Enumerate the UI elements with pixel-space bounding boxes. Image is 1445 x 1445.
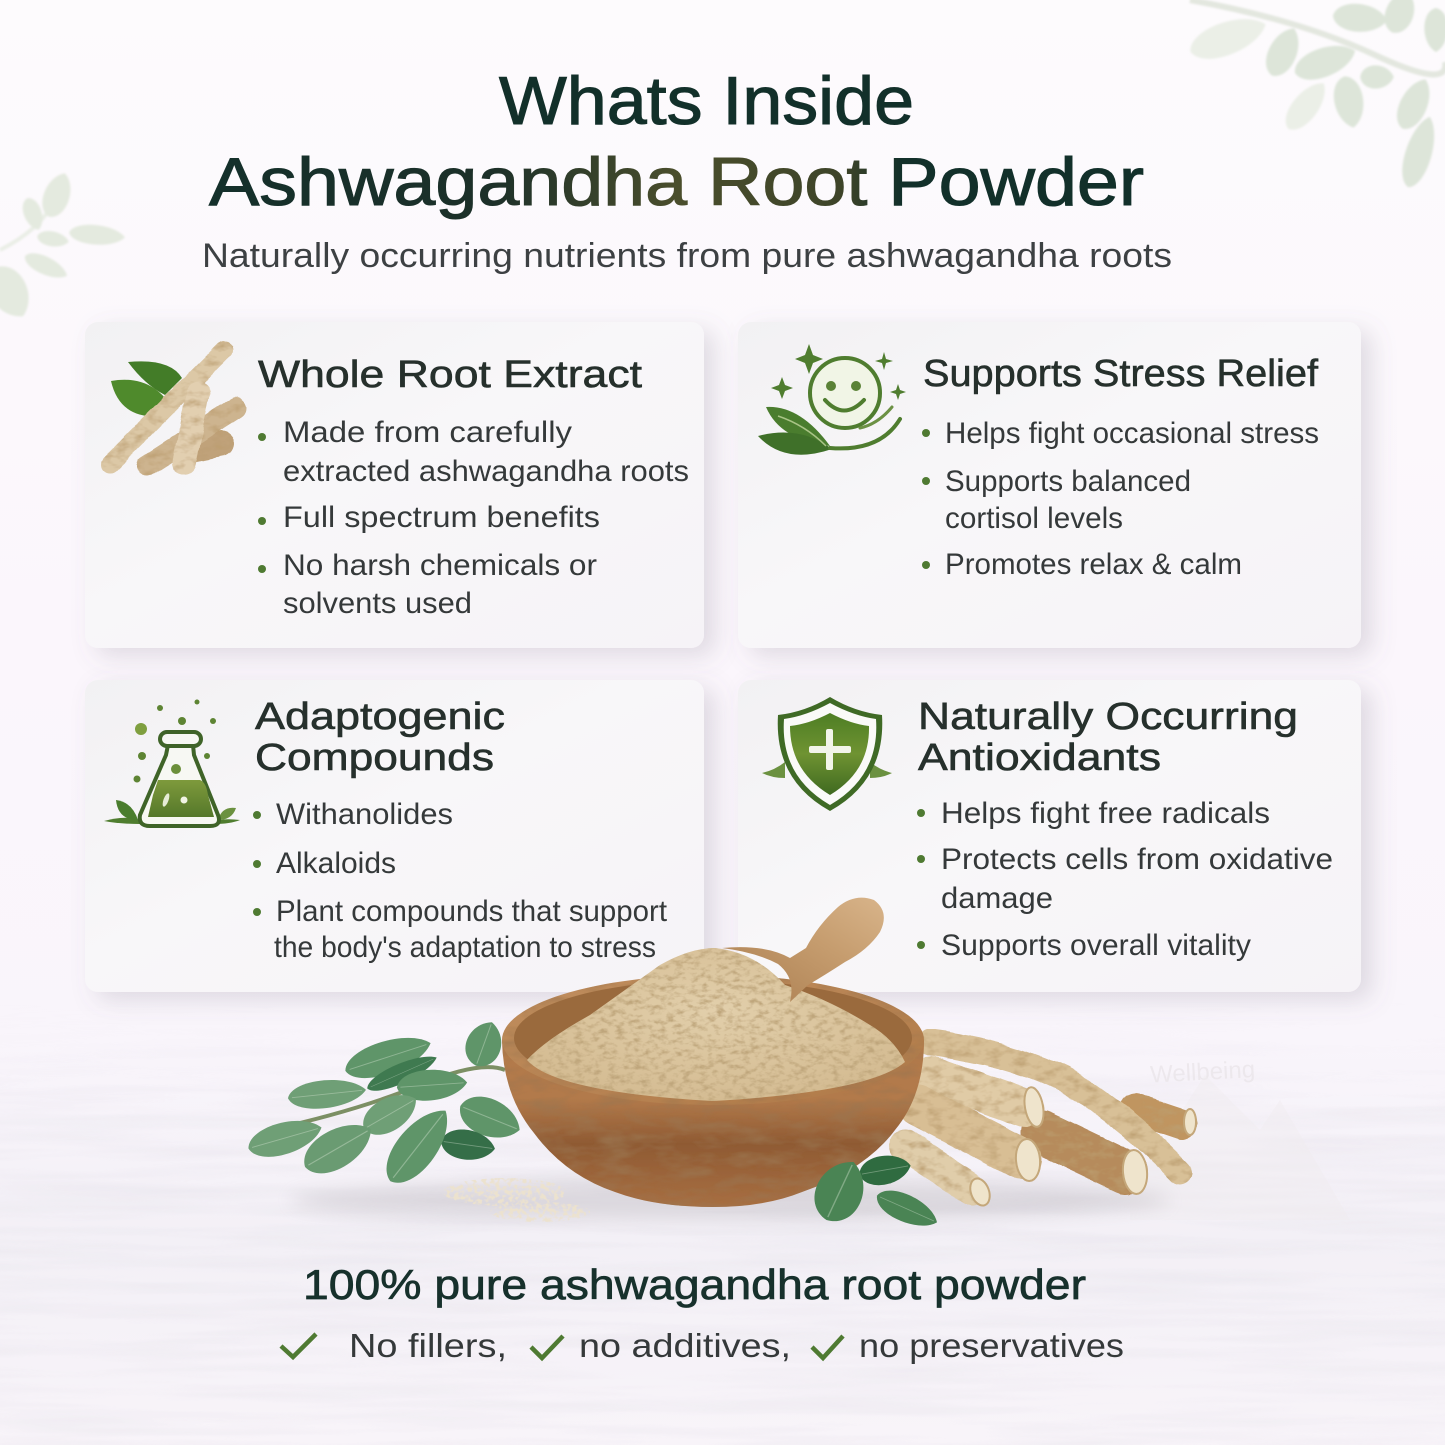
icon: flask with droplets xyxy=(104,700,240,826)
icon: check 2 xyxy=(531,1336,563,1358)
bullet list: Withanolides xyxy=(276,798,453,831)
claims row: No fillers, xyxy=(349,1327,507,1364)
bullet list: extracted ashwagandha roots xyxy=(283,455,689,488)
faint branch top left xyxy=(0,169,126,326)
panel: whole root extract xyxy=(85,322,704,648)
heading: Supports Stress Relief xyxy=(923,353,1318,395)
bullet list xyxy=(253,798,668,964)
bullet list xyxy=(258,416,689,620)
bullet list: cortisol levels xyxy=(945,502,1123,535)
title xyxy=(209,63,1144,220)
panel: naturally occurring antioxidants xyxy=(738,680,1361,992)
wooden scoop xyxy=(722,898,884,1002)
heading: Naturally Occurring xyxy=(918,696,1298,738)
title: Ashwagandha Root Powder xyxy=(209,144,1144,220)
bullet list: Full spectrum benefits xyxy=(283,501,600,534)
watermark xyxy=(1130,1056,1350,1220)
background streak texture xyxy=(0,1000,1445,1445)
subtitle: Naturally occurring nutrients from pure ashwagandha roots xyxy=(202,237,1172,275)
bullet list: No harsh chemicals or xyxy=(283,549,597,582)
icon: roots and leaves xyxy=(110,350,236,466)
bullet list xyxy=(917,797,1333,962)
spilled powder xyxy=(443,1178,590,1222)
bullet list: Made from carefully xyxy=(283,416,572,449)
claims row xyxy=(281,1327,1124,1364)
bullet list: Helps fight free radicals xyxy=(941,797,1270,830)
bullet list: Protects cells from oxidative xyxy=(941,843,1333,876)
bullet list: Promotes relax & calm xyxy=(945,548,1242,581)
watermark: Wellbeing xyxy=(1149,1056,1256,1089)
ground shadow under product xyxy=(290,1180,1170,1220)
powder mound xyxy=(527,948,905,1101)
bullet list: the body's adaptation to stress xyxy=(274,931,656,964)
icon: check 1 xyxy=(281,1334,316,1357)
left leaf cluster xyxy=(244,1016,527,1193)
faint branch top right xyxy=(1185,0,1445,191)
bullet list: Supports balanced xyxy=(945,465,1191,498)
heading: Whole Root Extract xyxy=(258,354,643,396)
panel: adaptogenic compounds xyxy=(85,680,704,992)
small leaves near bowl xyxy=(805,1151,942,1235)
claims row: no preservatives xyxy=(859,1327,1124,1364)
bullet list xyxy=(922,417,1319,581)
bowl xyxy=(502,975,924,1207)
product photo: bowl of powder with leaves and roots xyxy=(244,898,1196,1235)
heading: Adaptogenic xyxy=(255,696,505,738)
icon: smiling face with leaves xyxy=(758,344,906,455)
claims row: no additives, xyxy=(579,1327,791,1364)
roots right of bowl xyxy=(905,1042,1196,1208)
bullet list: solvents used xyxy=(283,587,472,620)
heading: Antioxidants xyxy=(918,737,1161,779)
panel: supports stress relief xyxy=(738,322,1361,648)
heading xyxy=(255,696,505,779)
icon: shield with plus xyxy=(762,697,892,811)
bullet list: damage xyxy=(941,882,1053,915)
bottom headline: 100% pure ashwagandha root powder xyxy=(303,1261,1086,1308)
bullet list: Alkaloids xyxy=(276,847,396,880)
bullet list: Helps fight occasional stress xyxy=(945,417,1319,450)
heading xyxy=(918,696,1298,779)
title: Whats Inside xyxy=(499,63,914,139)
icon: check 3 xyxy=(812,1336,843,1358)
bullet list: Supports overall vitality xyxy=(941,929,1251,962)
heading: Compounds xyxy=(255,737,494,779)
bullet list: Plant compounds that support xyxy=(276,895,668,928)
